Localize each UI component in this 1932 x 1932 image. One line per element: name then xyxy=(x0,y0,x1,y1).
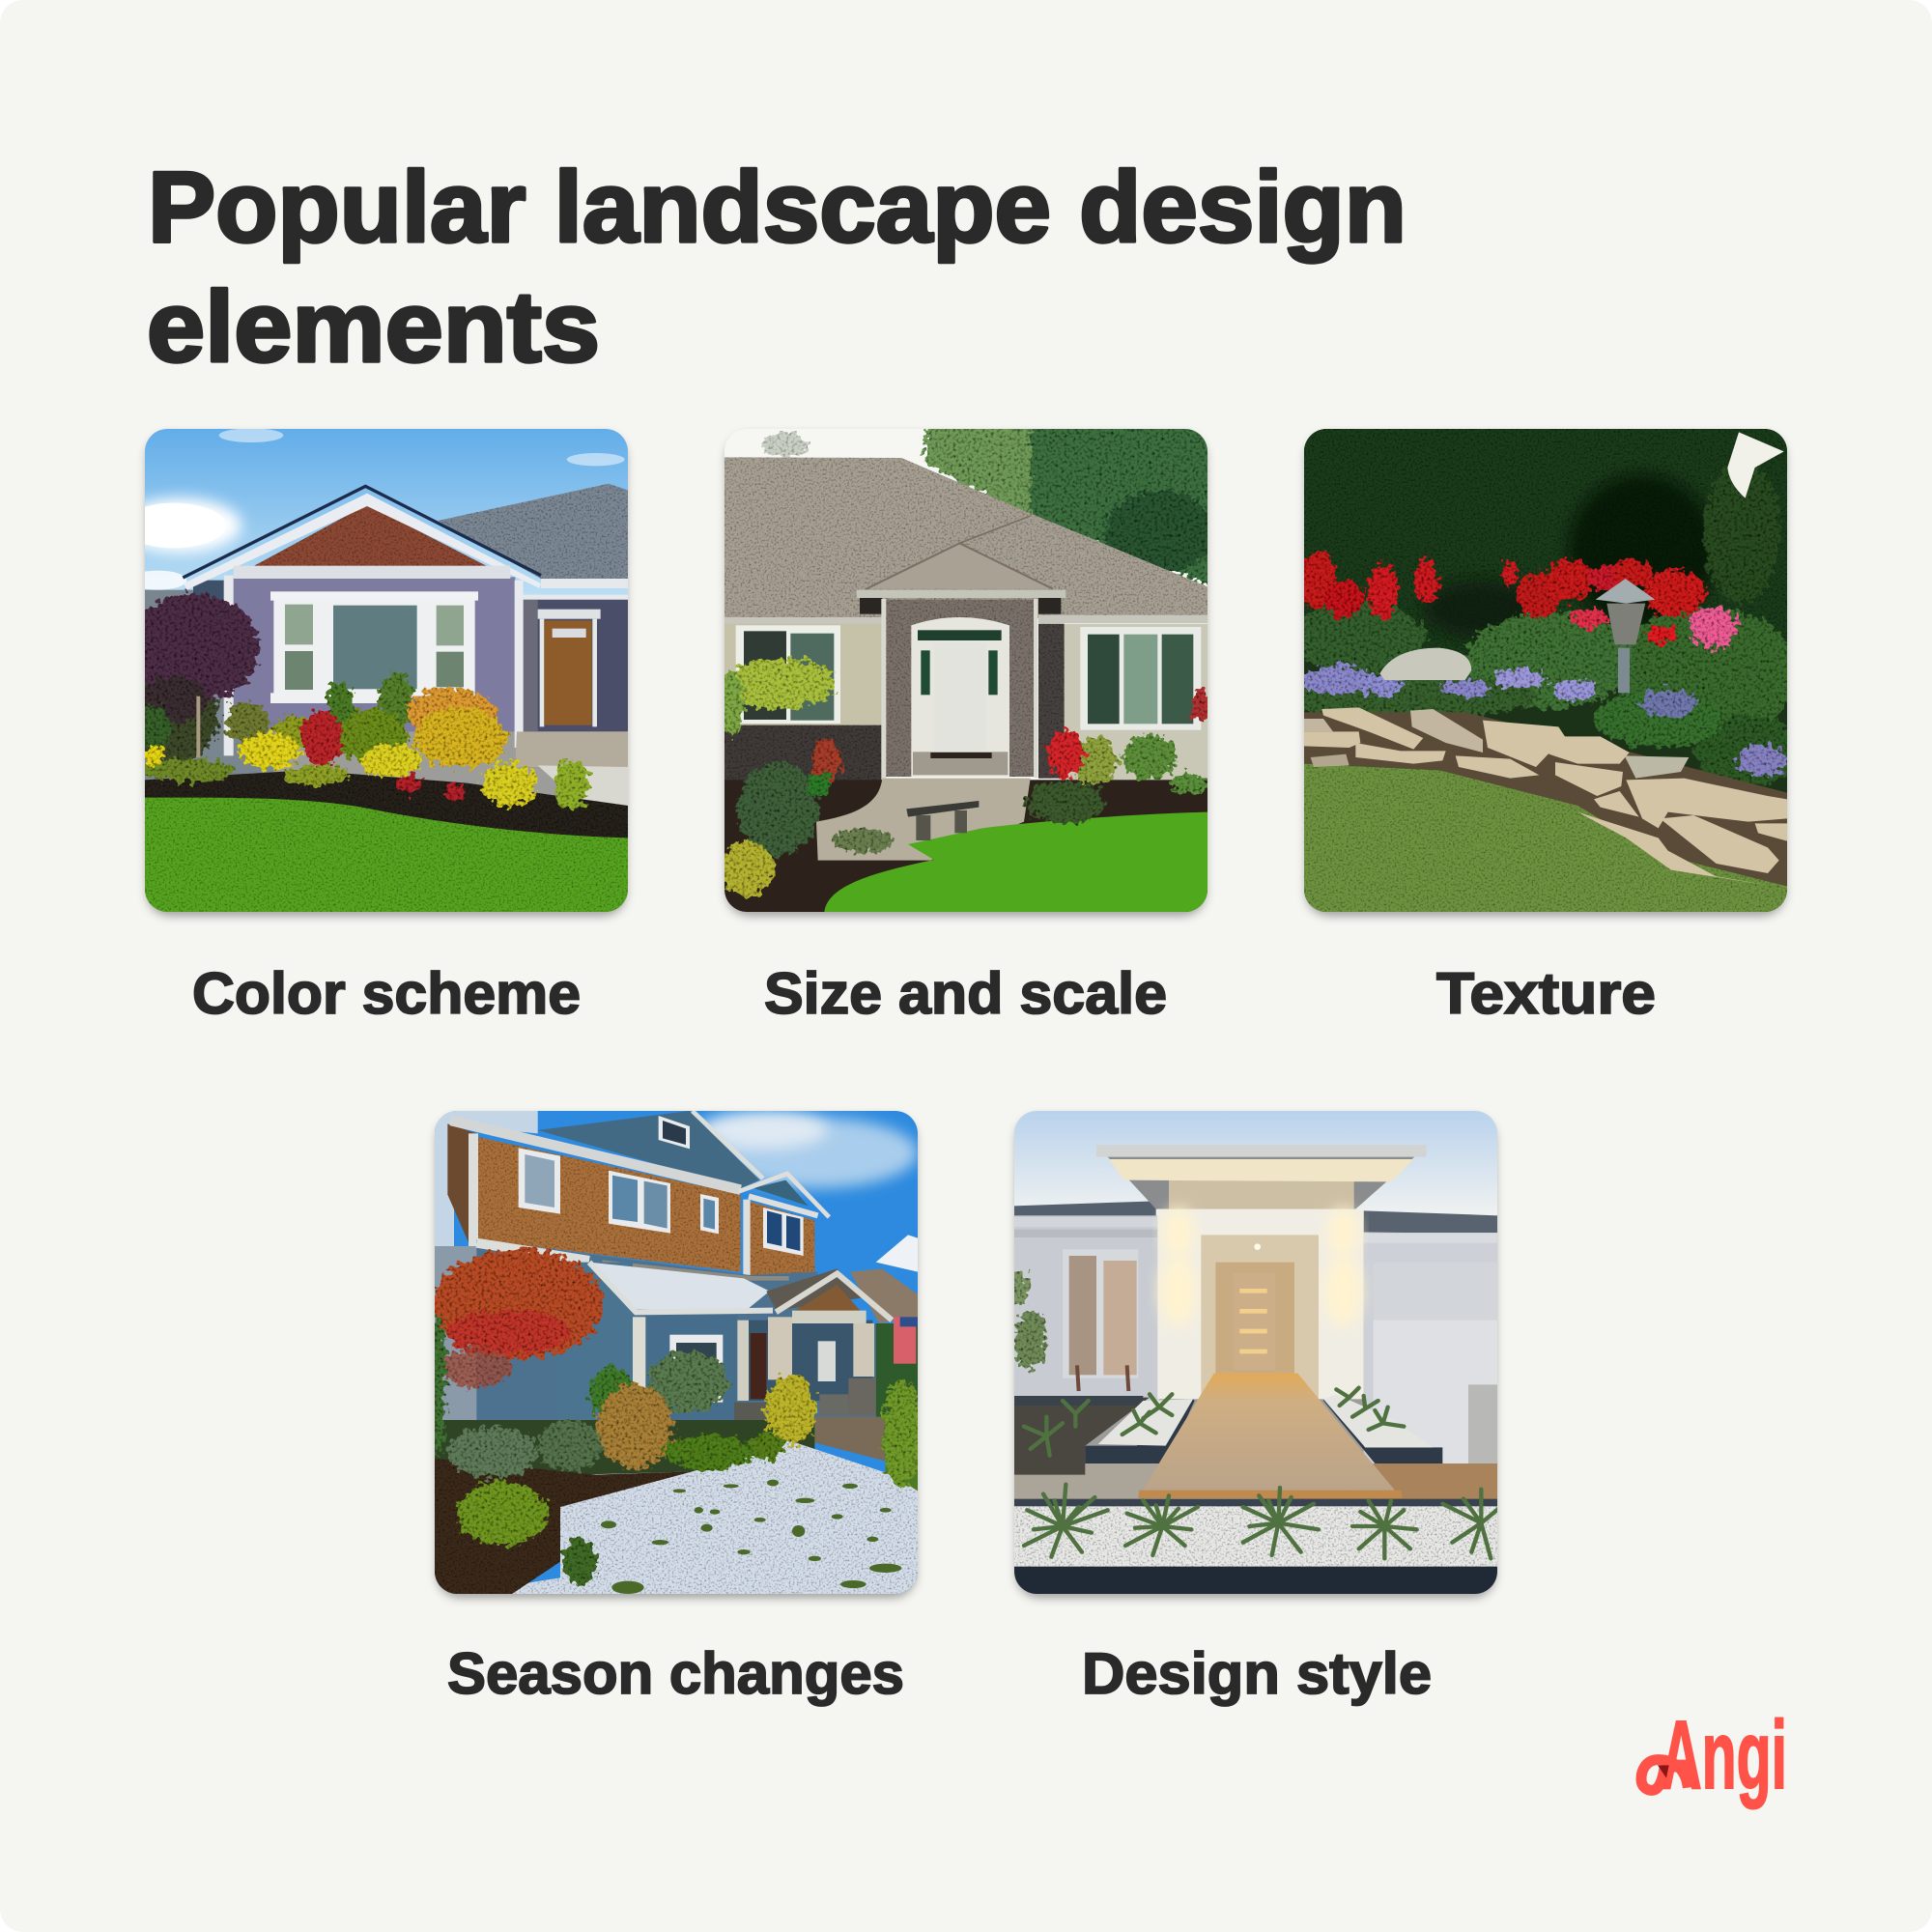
title xyxy=(147,152,1406,384)
label: size and scale: Size and scale xyxy=(764,961,1167,1026)
label: season changes: Season changes xyxy=(447,1641,904,1706)
decorative spiky plants xyxy=(1024,1485,1108,1557)
label: color scheme: Color scheme xyxy=(192,961,581,1026)
photo: size and scale house xyxy=(718,422,1220,912)
label: design style: Design style xyxy=(1082,1641,1432,1706)
decorative leaves on snow xyxy=(695,1507,703,1514)
panel: design style xyxy=(1009,1111,1500,1598)
photo: texture garden xyxy=(1304,429,1787,912)
panel: season changes xyxy=(430,1111,921,1598)
photo: design style house xyxy=(1009,1111,1500,1594)
title: elements xyxy=(147,271,600,384)
panel: texture xyxy=(1265,429,1804,916)
panel: size and scale xyxy=(718,422,1220,916)
photo: season changes house xyxy=(430,1111,921,1594)
label: texture: Texture xyxy=(1436,961,1656,1026)
logo: Angi: Angi xyxy=(1661,1701,1787,1809)
panel: color scheme xyxy=(116,428,628,916)
logo: Angi xyxy=(1641,1701,1787,1809)
photo: color scheme house xyxy=(116,428,628,912)
title: Popular landscape design xyxy=(148,152,1406,264)
